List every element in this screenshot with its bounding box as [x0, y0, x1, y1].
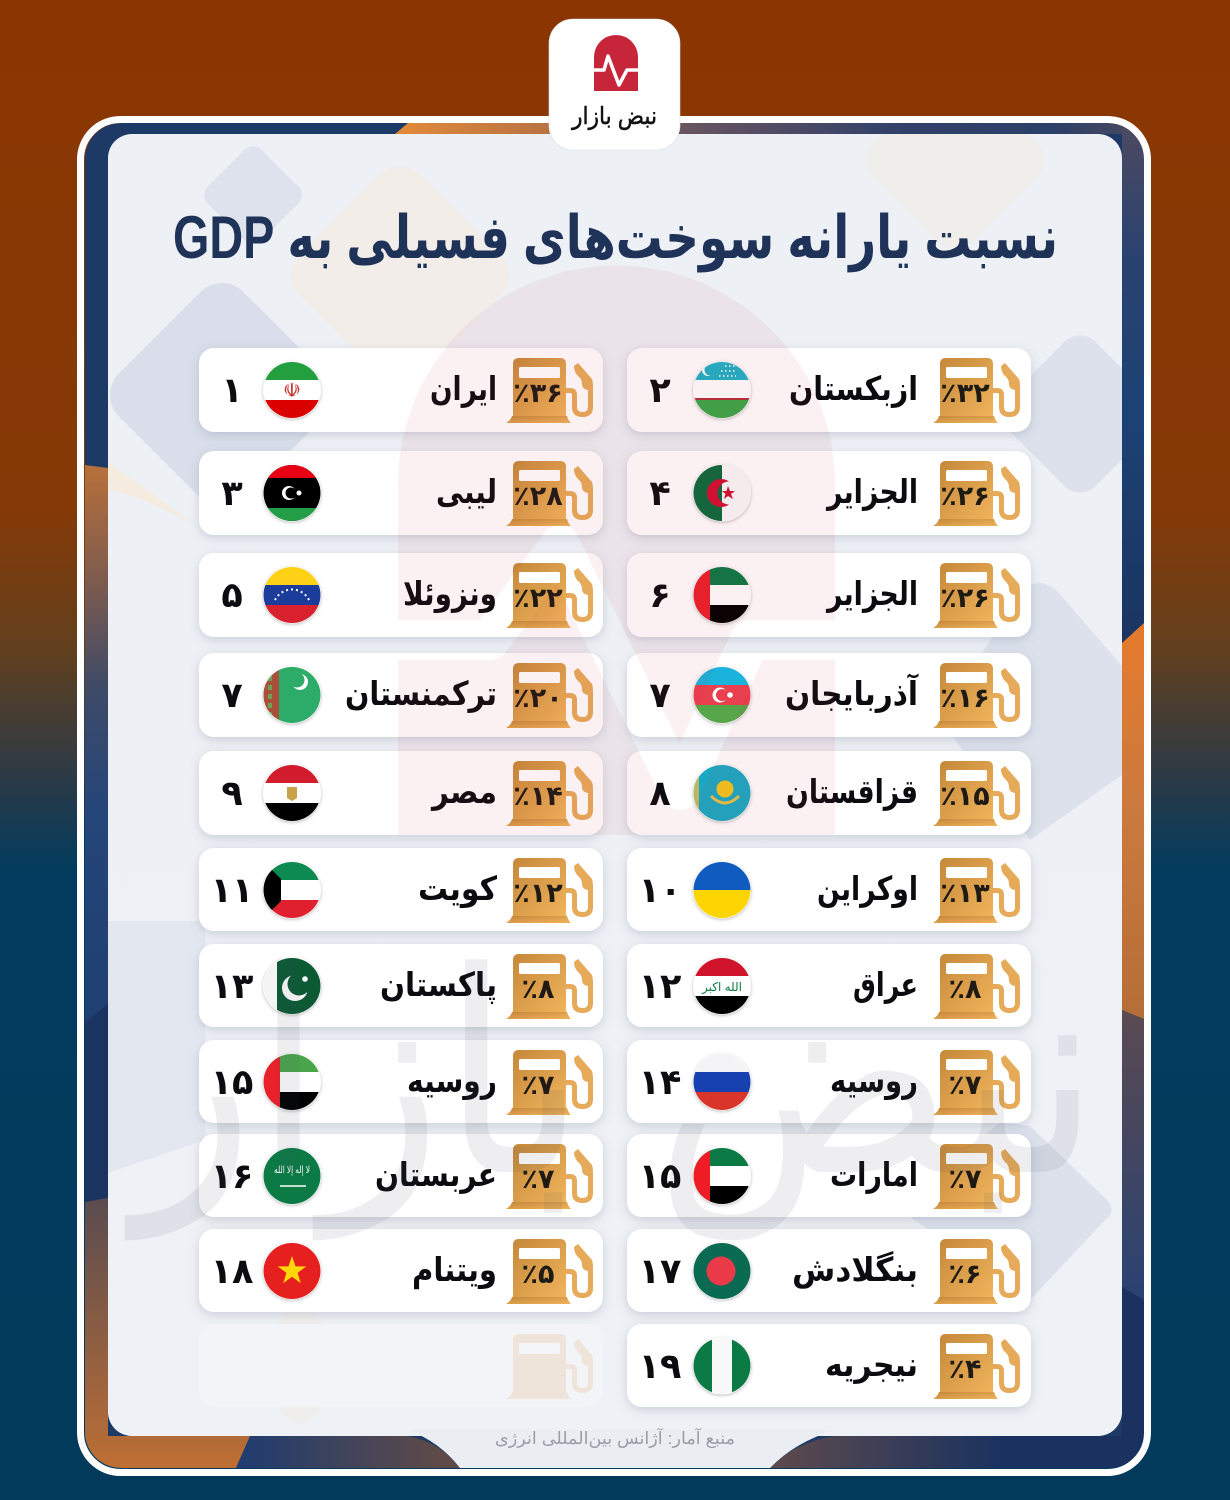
pump with value: ٪۷	[522, 1070, 555, 1100]
flag: UAE	[692, 565, 752, 625]
flag: Iraq: الله اکبر	[701, 980, 742, 995]
frame: coloured border strip	[85, 123, 1144, 1468]
name: الجزایر	[825, 473, 918, 512]
name: قزاقستان	[786, 773, 918, 812]
rank 15: ۱۵	[211, 1063, 253, 1102]
rank 13: ۱۳	[211, 967, 253, 1006]
name: نیجریه	[825, 1346, 918, 1385]
row: Nigeria	[627, 1324, 1031, 1407]
rank 19: ۱۹	[639, 1347, 681, 1386]
pump with value	[933, 461, 1020, 526]
source note: منبع آمار: آژانس بین‌المللی انرژی	[495, 1427, 735, 1449]
pump with value: ٪۲۲	[513, 583, 563, 613]
rank 16: ۱۶	[211, 1157, 253, 1196]
pump with value	[506, 1144, 593, 1209]
watermark: large pink logo arch	[380, 250, 860, 850]
row: Libya	[199, 451, 603, 535]
row: Iran	[199, 348, 603, 432]
pump with value	[933, 1050, 1020, 1115]
main light panel	[108, 134, 1122, 1468]
flag: Libya	[262, 463, 322, 523]
name: الجزایر	[825, 575, 918, 614]
pump with value: ٪۱۴	[513, 781, 563, 811]
pump with value: ٪۸	[522, 974, 555, 1004]
row: Kuwait	[199, 848, 603, 931]
rank 10: ۱۰	[639, 871, 681, 910]
flag: Algeria	[692, 463, 752, 523]
pump with value	[506, 563, 593, 628]
flag: Egypt	[262, 763, 322, 823]
pump with value: ٪۷	[949, 1070, 982, 1100]
rank 7: ۷	[649, 676, 671, 715]
name: ویتنام	[412, 1251, 497, 1290]
name: ترکمنستان	[345, 675, 497, 714]
row: Saudi Arabia	[199, 1134, 603, 1217]
pump with value	[933, 663, 1020, 728]
pump with value: ٪۲۰	[513, 683, 563, 713]
flag: Russia	[692, 1052, 752, 1112]
pump with value: ٪۷	[949, 1164, 982, 1194]
rank 9: ۹	[221, 774, 243, 813]
name: ازبکستان	[789, 370, 918, 408]
icon: red arch with pulse	[593, 35, 639, 91]
rank 6: ۶	[649, 576, 671, 615]
pump with value	[933, 761, 1020, 826]
row: Venezuela	[199, 553, 603, 637]
watermark: large grey brand text: نبض بازار	[123, 920, 1100, 1242]
row: Iraq	[627, 944, 1031, 1027]
name: ایران	[430, 370, 497, 409]
flag: Ukraine	[692, 860, 752, 920]
row: Bangladesh	[627, 1229, 1031, 1312]
flag: Bangladesh	[692, 1241, 752, 1301]
flag: Kazakhstan	[692, 763, 752, 823]
name: ونزوئلا	[403, 575, 497, 614]
name: امارات	[830, 1156, 918, 1194]
pump with value	[933, 563, 1020, 628]
name: کویت	[418, 870, 498, 909]
pump with value: ٪۷	[522, 1164, 555, 1194]
name: لیبی	[436, 473, 497, 510]
rank 1: ۱	[221, 371, 243, 410]
pump with value	[506, 663, 593, 728]
flag: UAE	[262, 1052, 322, 1112]
flag: Saudi Arabia	[262, 1146, 322, 1206]
pump with value	[506, 761, 593, 826]
logo wordmark: نبض بازار	[571, 103, 657, 130]
pump with value	[933, 954, 1020, 1019]
rank 12: ۱۲	[639, 967, 681, 1006]
pump with value: ٪۳۲	[940, 378, 990, 408]
rank 14: ۱۴	[639, 1063, 681, 1102]
row: Algeria	[627, 451, 1031, 535]
logo badge	[549, 19, 680, 150]
pump with value	[506, 954, 593, 1019]
rank 15: ۱۵	[639, 1157, 681, 1196]
empty placeholder row with faint pump	[199, 1324, 603, 1407]
row: Algeria label with UAE flag	[627, 553, 1031, 637]
name: آذربایجان	[785, 673, 919, 713]
pump with value: ٪۲۸	[513, 481, 563, 511]
pump with value: ٪۴	[949, 1354, 981, 1384]
rank 4: ۴	[649, 474, 671, 513]
pump with value: ٪۱۶	[940, 683, 990, 713]
flag: Turkmenistan	[262, 665, 322, 725]
flag: Iraq	[692, 956, 752, 1016]
rank 7: ۷	[221, 676, 243, 715]
row: Uzbekistan	[627, 348, 1031, 432]
row: UAE	[627, 1134, 1031, 1217]
pump with value: ٪۸	[949, 974, 982, 1004]
flag: Azerbaijan	[692, 665, 752, 725]
flag: UAE	[692, 1146, 752, 1206]
rank 11: ۱۱	[211, 871, 253, 910]
name: روسیه	[407, 1062, 497, 1101]
row: Russia label with UAE flag	[199, 1040, 603, 1123]
pump with value	[506, 1050, 593, 1115]
pump with value: ٪۱۳	[940, 878, 990, 908]
pump with value: ٪۲۶	[940, 583, 990, 613]
row: Vietnam	[199, 1229, 603, 1312]
row: Egypt	[199, 751, 603, 835]
flag: Uzbekistan	[692, 360, 752, 420]
pump with value	[506, 858, 593, 923]
rank table: left column	[199, 348, 603, 1407]
background pale diamond shapes	[98, 61, 1168, 1430]
pump with value: ٪۳۶	[513, 378, 563, 408]
flag: Venezuela	[262, 565, 322, 625]
pump with value	[506, 358, 593, 423]
pump with value: ٪۶	[949, 1259, 981, 1289]
row: Turkmenistan	[199, 653, 603, 737]
pump with value	[933, 1144, 1020, 1209]
name: روسیه	[830, 1062, 918, 1101]
pump with value: ٪۱۵	[940, 781, 990, 811]
pump with value	[933, 1239, 1020, 1304]
rank table: right column	[627, 348, 1031, 1407]
name: پاکستان	[380, 966, 497, 1004]
name: مصر	[430, 773, 497, 812]
row: Azerbaijan	[627, 653, 1031, 737]
row: Kazakhstan	[627, 751, 1031, 835]
flag: Iran	[262, 360, 322, 420]
pump with value	[933, 1334, 1020, 1399]
rank 3: ۳	[221, 474, 243, 513]
pump with value	[933, 358, 1020, 423]
flag: Pakistan	[262, 956, 327, 1016]
flag: Vietnam	[262, 1241, 322, 1301]
flag: Saudi Arabia: لا إله إلا الله	[274, 1165, 310, 1176]
pump with value	[506, 461, 593, 526]
flag: Iran: ☫	[283, 378, 301, 402]
name: عربستان	[375, 1156, 497, 1195]
flag: Kuwait	[262, 860, 322, 920]
row: Pakistan	[199, 944, 603, 1027]
pump with value: ٪۱۲	[513, 878, 563, 908]
pump with value: ٪۲۶	[940, 481, 990, 511]
pump with value	[933, 858, 1020, 923]
rank 5: ۵	[221, 576, 243, 615]
rank 2: ۲	[649, 371, 671, 410]
pump with value: ٪۵	[522, 1259, 554, 1289]
flag: Nigeria	[692, 1336, 752, 1396]
row: Russia	[627, 1040, 1031, 1123]
rank 18: ۱۸	[211, 1252, 253, 1291]
rank 17: ۱۷	[639, 1252, 681, 1291]
pump with value	[506, 1239, 593, 1304]
rank 8: ۸	[649, 774, 671, 813]
row: Ukraine	[627, 848, 1031, 931]
name: عراق	[853, 966, 918, 1005]
name: اوکراین	[817, 870, 918, 909]
name: بنگلادش	[792, 1250, 918, 1289]
frame: white outline	[80, 120, 1148, 1472]
